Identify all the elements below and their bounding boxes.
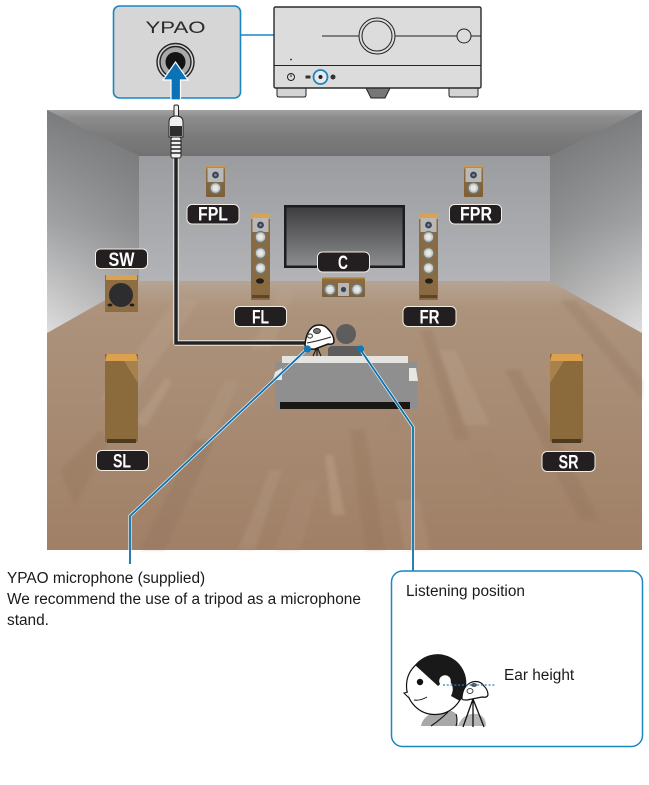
ceiling (47, 110, 642, 160)
text: microphone caption: stand. (7, 612, 49, 629)
ear height label: Ear height (504, 667, 575, 684)
microphone plug (169, 105, 183, 158)
TV (284, 205, 405, 268)
speaker: C (322, 277, 365, 297)
listener silhouette (328, 324, 362, 356)
left wall (47, 110, 139, 333)
volume knob (359, 18, 395, 54)
head illustration with microphone at ear height (404, 654, 496, 727)
wood floor (47, 281, 642, 550)
label: FR: FR (420, 306, 440, 328)
cable to microphone (176, 155, 310, 343)
speaker: SW (105, 275, 138, 312)
label: FR (403, 306, 456, 328)
text: microphone caption (7, 570, 361, 629)
label: FPL: FPL (198, 204, 228, 226)
connector line from panel to receiver (241, 35, 320, 70)
label: SR (542, 452, 595, 474)
speaker: FL (251, 214, 270, 300)
power button (288, 74, 294, 80)
speaker: FPL (206, 166, 225, 197)
label: SR: SR (558, 452, 578, 474)
label: SL (96, 450, 148, 472)
label: FPR: FPR (460, 204, 492, 226)
room illustration (47, 110, 642, 550)
label: FL: FL (252, 306, 269, 328)
sofa (273, 356, 418, 410)
text: microphone caption: We recommend the use of a tripod as a microphone (7, 591, 361, 608)
speaker: SL (105, 354, 138, 443)
AV receiver front panel (274, 7, 481, 98)
jack socket (157, 44, 194, 80)
label: FL (234, 306, 286, 328)
label: C (318, 252, 370, 274)
back wall (139, 156, 550, 282)
label: SL: SL (113, 450, 131, 472)
receiver feet (277, 88, 478, 98)
leader line: listening position (357, 345, 413, 571)
speaker: SR (550, 354, 583, 443)
label: SW: SW (108, 249, 135, 271)
speaker labels (96, 204, 595, 473)
speaker: FR (419, 214, 438, 300)
arrow: insert plug (163, 62, 188, 100)
input selector knob (457, 29, 471, 43)
right wall (550, 110, 642, 333)
label: SW (96, 249, 148, 271)
panel heading: Listening position (406, 583, 525, 600)
leader line: microphone (130, 345, 311, 564)
text: microphone caption: YPAO microphone (supplied) (7, 570, 205, 587)
label: C: C (338, 252, 348, 274)
panel: listening position (392, 571, 642, 746)
YPAO heading: YPAO (146, 19, 206, 37)
speaker: FPR (464, 166, 483, 197)
panel: YPAO jack close-up (114, 6, 240, 100)
highlighted YPAO jack (314, 70, 328, 84)
YPAO microphone on tripod (305, 325, 334, 356)
